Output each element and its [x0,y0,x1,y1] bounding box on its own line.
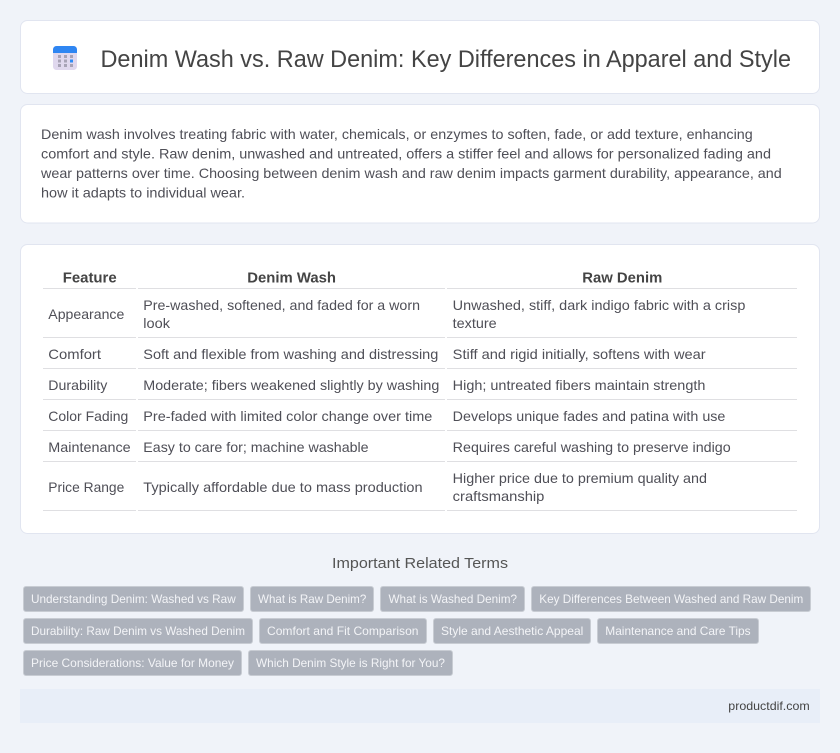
row: Maintenance: Requires careful washing to preserve indigo [453,439,731,455]
footer source text: productdif.com [728,699,810,713]
row: Durability: Moderate; fibers weakened slightly by washing [143,377,439,393]
intro text: wear patterns over time. Choosing between denim wash and raw denim impacts garment durability, appearance, and [40,165,782,181]
table header row [43,270,797,289]
row: Comfort [43,346,797,369]
row: Price Range: Higher price due to premium quality and [453,470,707,486]
row: Price Range: craftsmanship [453,488,545,504]
chip: Style and Aesthetic [434,618,590,644]
intro text: comfort and style. Raw denim, unwashed and untreated, offers a stiffer feel and allows for personalized fading and [41,146,771,162]
row: Durability [43,377,797,400]
row: Color Fading: Pre-faded with limited color change over time [143,408,433,424]
chip: What is Washed Denim: What is Washed Denim? [388,592,517,606]
intro text: Denim wash involves treating fabric with water, chemicals, or enzymes to soften, fade, or add texture, enhancing [41,126,753,142]
related terms chips [24,586,810,676]
icon: calendar [53,46,77,70]
chip: What is Raw Denim: What is Raw Denim? [258,592,367,606]
title: Denim Wash vs. Raw Denim: Key Differences in Apparel and Style [100,46,791,73]
panel: comparison table [20,244,820,534]
row: Comfort: Comfort [48,346,101,362]
row: Appearance: Pre-washed, softened, and faded for a worn [143,297,420,313]
table header row: Denim Wash [247,270,336,287]
row: Durability: High; untreated fibers maintain strength [453,377,705,393]
row: Appearance: Appearance [48,306,125,322]
table header row: Feature [63,270,117,287]
row: Color Fading: Color Fading [48,408,128,424]
chip: What is Raw Denim [250,586,374,612]
chip: Key Differences: Key Differences Between Washed and Raw Denim [539,592,803,606]
chip: Durability: Durability: Raw Denim vs Washed Denim [31,624,245,638]
panel: introduction [20,104,820,223]
table header row: Raw Denim [582,270,662,287]
chip: Price Considerations [24,650,242,676]
row: Durability: Durability [48,377,107,393]
row: Appearance: texture [453,315,497,331]
footer bar [20,689,820,723]
chip: Comfort and Fit: Comfort and Fit Comparison [267,624,418,638]
row: Maintenance: Easy to care for; machine washable [143,439,369,455]
heading: Important Related Terms: Important Related Terms [332,555,508,572]
row: Price Range: Typically affordable due to mass production [143,479,423,495]
chip: Understanding Denim [24,586,244,612]
row: Comfort: Stiff and rigid initially, softens with wear [453,346,706,362]
intro text: how it adapts to individual wear. [41,184,245,200]
chip: What is Washed Denim [380,586,524,612]
row: Maintenance: Maintenance [48,439,131,455]
chip: Durability [24,618,252,644]
panel: title header [20,20,820,94]
chip: Comfort and Fit [260,618,426,644]
row: Color Fading: Develops unique fades and patina with use [453,408,726,424]
row: Comfort: Soft and flexible from washing and distressing [143,346,438,362]
intro text [40,126,782,200]
chip: Price Considerations: Price Considerations: Value for Money [31,656,234,670]
chip: Key Differences [532,586,810,612]
row: Appearance [43,297,797,338]
chip: Maintenance and Care: Maintenance and Care Tips [605,624,751,638]
chip: Which Denim Style [248,650,452,676]
row: Price Range [43,470,797,511]
chip: Understanding Denim: Understanding Denim: Washed vs Raw [31,592,236,606]
row: Maintenance [43,439,797,462]
row: Appearance: Unwashed, stiff, dark indigo fabric with a crisp [453,297,746,313]
row: Price Range: Price Range [48,479,125,495]
chip: Which Denim Style: Which Denim Style is Right for You? [256,656,445,670]
row: Appearance: look [143,315,171,331]
chip: Style and Aesthetic: Style and Aesthetic Appeal [441,624,583,638]
chip: Maintenance and Care [598,618,758,644]
row: Color Fading [43,408,797,431]
